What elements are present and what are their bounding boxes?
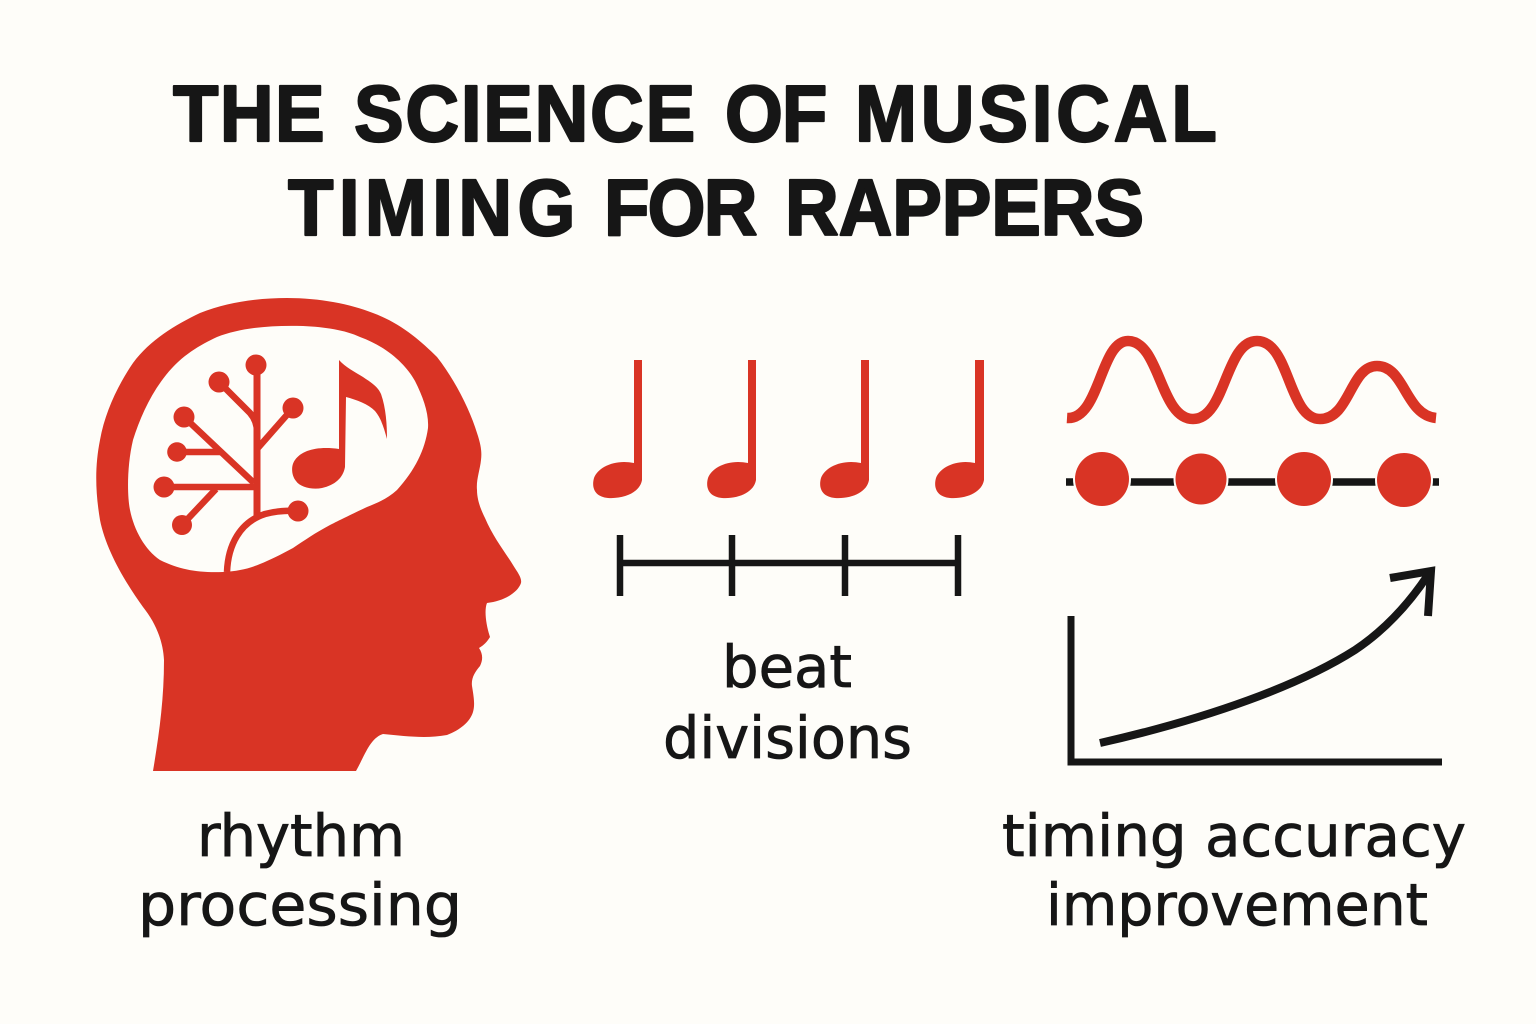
chart: timing accuracy growth	[1071, 571, 1442, 762]
icon: waveform	[1067, 341, 1436, 419]
icon: timing dots on a line	[1066, 452, 1439, 507]
title: THE	[173, 70, 325, 159]
icon: eighth note	[292, 360, 387, 489]
label: timing accuracy improvement	[1002, 802, 1466, 939]
arrow: rising curve	[1100, 571, 1431, 743]
title	[173, 70, 1217, 253]
label: rhythm processing	[138, 802, 462, 939]
icon: beat ruler	[620, 535, 959, 596]
title: TIMING	[288, 164, 575, 253]
icon: neural tree	[154, 354, 308, 572]
panel: beat divisions	[593, 360, 984, 772]
panel: timing accuracy improvement	[1002, 341, 1466, 939]
label: beat divisions: beat	[722, 633, 852, 701]
icon: head silhouette with brain	[96, 298, 521, 771]
label: timing accuracy improvement: timing accuracy	[1002, 802, 1466, 870]
title: FOR	[604, 164, 757, 253]
title: RAPPERS	[785, 164, 1144, 253]
label: beat divisions	[663, 633, 912, 772]
chart axes	[1071, 616, 1442, 762]
title: OF	[725, 70, 827, 159]
label: rhythm processing: rhythm	[197, 802, 405, 870]
title: MUSICAL	[855, 70, 1217, 159]
title: SCIENCE	[354, 70, 695, 159]
label: beat divisions: divisions	[663, 704, 912, 772]
label: rhythm processing: processing	[138, 871, 462, 939]
icon: quarter notes	[593, 360, 984, 498]
head silhouette	[96, 298, 521, 771]
panel: rhythm processing	[96, 298, 521, 939]
label: timing accuracy improvement: improvement	[1046, 871, 1428, 939]
